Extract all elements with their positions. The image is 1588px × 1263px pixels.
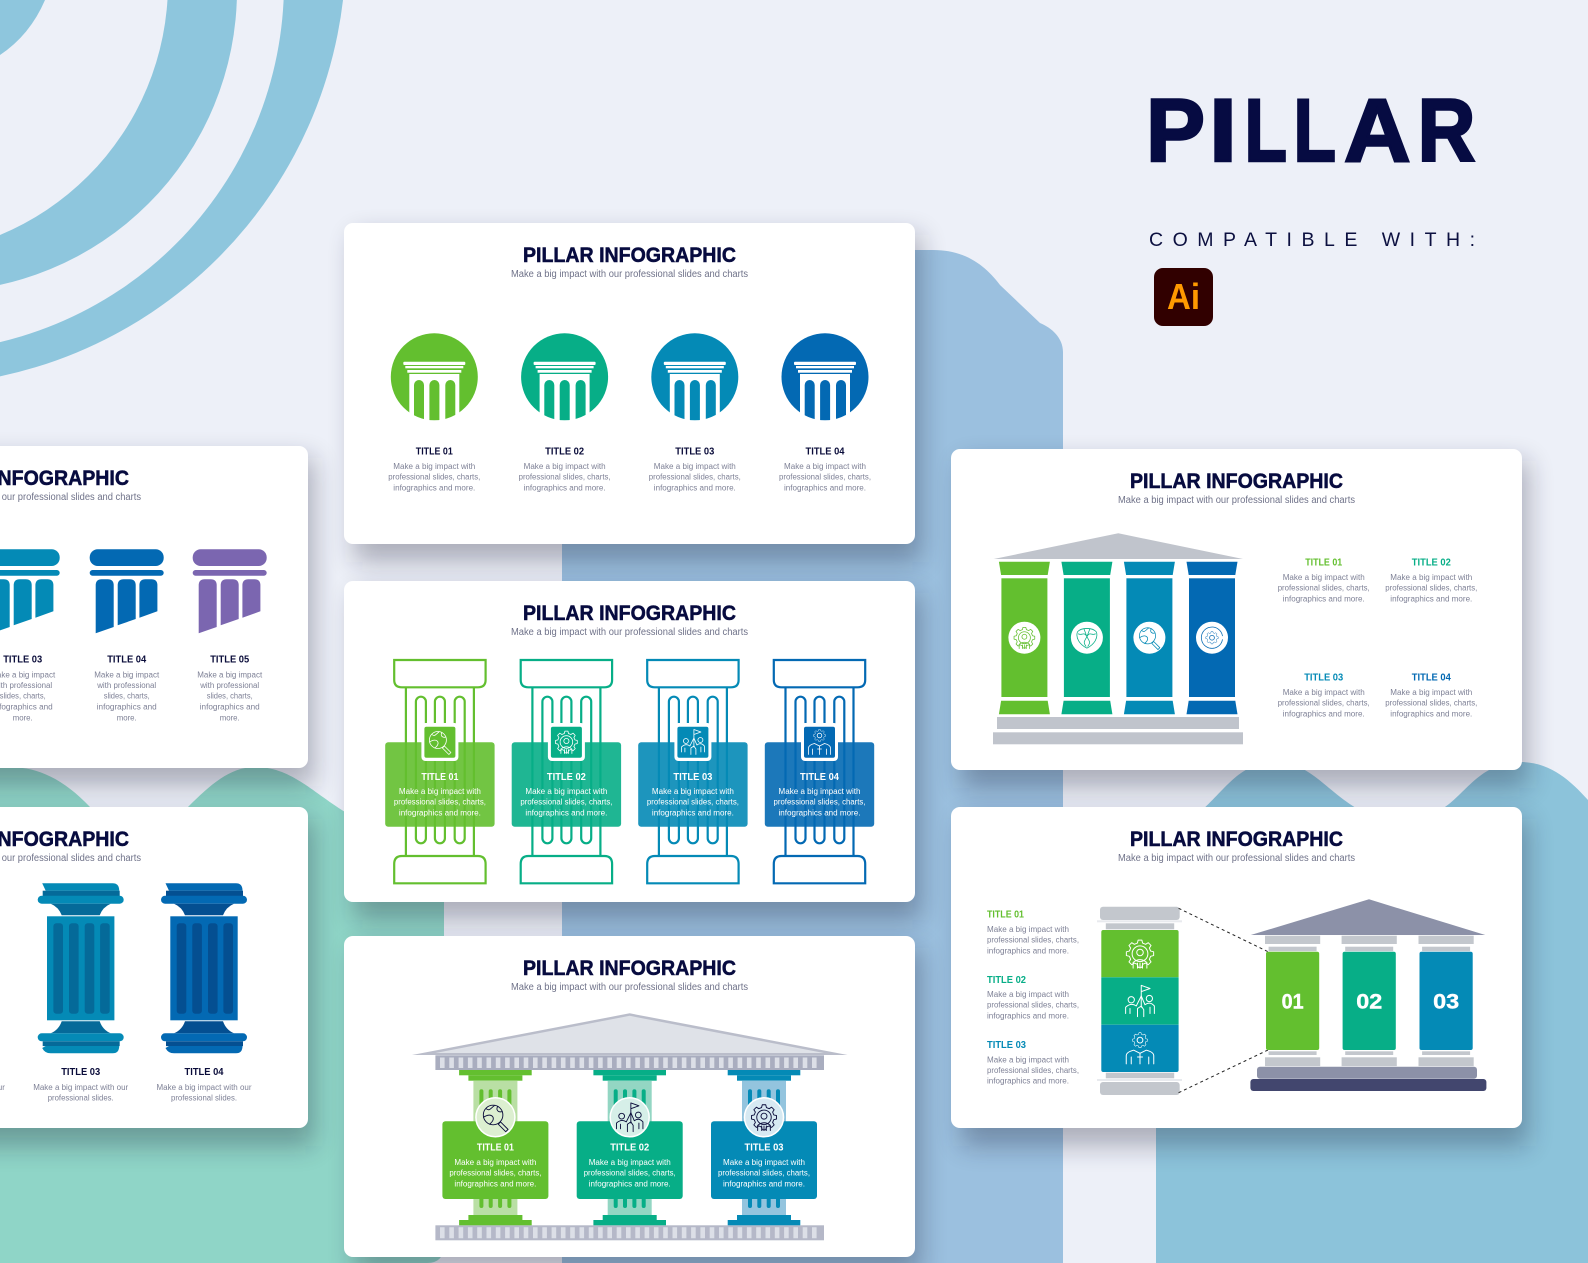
heading: PILLAR INFOGRAPHIC [523,601,736,625]
circle pillar 03: TITLE 03 [675,446,715,457]
text block 03 [1278,672,1370,718]
circle pillar 03 [649,333,741,492]
pillar column 05: Make a big impact [197,670,263,679]
temple column 02 [1342,936,1397,1066]
text block 01: TITLE 01 [987,910,1024,921]
heading: Make a big impact with our professional slides and charts [511,627,748,638]
heading: Make a big impact with our professional slides and charts [1118,495,1355,506]
panel: temple with three columns [344,936,915,1257]
icon: Adobe Illustrator: Ai [1167,276,1200,317]
outline pillar 04: infographics and more. [778,808,860,817]
text block 03: infographics and more. [1283,709,1365,718]
column 04: TITLE 04 [184,1067,224,1078]
column 01: Make a big impact with [454,1158,536,1167]
outline pillar 03: Make a big impact with [652,787,734,796]
column 01: TITLE 01 [477,1143,514,1154]
panel: zoomed pillar and temple [951,807,1522,1128]
heading: Make a big impact with our professional slides and charts [1118,853,1355,864]
text block 01 [987,910,1079,955]
circle pillar 01: TITLE 01 [416,446,453,457]
pillar column 05: with professional [199,681,259,690]
outline pillar 01 [385,660,495,883]
title: I [1209,80,1237,180]
text block 04: professional slides, charts, [1385,699,1477,708]
column 03 [711,1070,817,1225]
column 04 [1186,562,1238,714]
column 02: infographics and more. [589,1179,671,1188]
heading: PILLAR INFOGRAPHIC [1130,827,1343,851]
pillar column 04: slides, charts, [104,692,150,701]
text block 02 [987,975,1079,1020]
pillar column 04: infographics and [97,702,157,711]
column 03: Make a big impact with [723,1158,805,1167]
pillar column 05: more. [220,713,240,722]
temple column 01: 01 [1282,990,1304,1013]
heading [0,827,141,864]
text block 02: professional slides, charts, [987,1001,1079,1010]
column 02: professional slides, charts, [584,1169,676,1178]
icon: Adobe Illustrator [1154,268,1213,326]
pillar column 05: TITLE 05 [210,655,250,666]
column 01 [999,562,1050,714]
text block 04 [1385,672,1477,718]
text block 02 [1385,557,1477,603]
pillar column 04: with professional [96,681,156,690]
outline pillar 02: infographics and more. [525,808,607,817]
circle pillar 02: TITLE 02 [545,446,584,457]
column 04: Make a big impact with our [156,1083,252,1092]
outline pillar 02 [512,660,621,883]
circle pillar 02 [519,333,611,492]
circle pillar 04: TITLE 04 [806,446,845,457]
pillar column 05: slides, charts, [207,692,253,701]
heading: PILLAR INFOGRAPHIC [523,243,736,267]
text block 02: infographics and more. [1390,594,1472,603]
outline pillar 03 [638,660,748,883]
circle pillar 01: infographics and more. [393,483,475,492]
outline pillar 03: TITLE 03 [673,772,713,783]
title: L [1294,80,1336,180]
heading [511,243,748,280]
heading [511,601,748,638]
column 02: Make a big impact with [589,1158,671,1167]
outline pillar 03: professional slides, charts, [647,798,739,807]
heading: PILLAR INFOGRAPHIC [1130,469,1343,493]
text block 01: infographics and more. [987,946,1069,955]
column 03: infographics and more. [723,1179,805,1188]
outline pillar 02: professional slides, charts, [520,798,612,807]
temple [1250,899,1486,1091]
panel: temple with four columns [951,449,1522,770]
circle pillar 02: infographics and more. [524,483,606,492]
text block 01: professional slides, charts, [987,936,1079,945]
roof [412,1013,848,1070]
outline pillar 04: Make a big impact with [778,787,860,796]
circle pillar 02: professional slides, charts, [519,473,611,482]
circle pillar 04: professional slides, charts, [779,473,871,482]
text block 03: TITLE 03 [1304,672,1344,683]
pillar column 04 [90,549,164,722]
circle pillar 03: Make a big impact with [654,462,736,471]
text block 02: Make a big impact with [1390,573,1472,582]
heading [0,466,141,503]
text block 03: TITLE 03 [987,1040,1026,1051]
heading [1118,827,1355,864]
floor [435,1225,824,1240]
text block 03: Make a big impact with [1283,688,1365,697]
text block 01: TITLE 01 [1305,557,1343,568]
pillar column 04: more. [117,713,137,722]
circle pillar 01: Make a big impact with [393,462,475,471]
compatible with label: COMPATIBLE WITH: [1149,229,1475,251]
column 03: professional slides, charts, [718,1169,810,1178]
text block 02: Make a big impact with [987,990,1069,999]
temple column 03: 03 [1433,990,1459,1013]
column 03 [33,883,129,1103]
dashed connector lines [1179,908,1268,1093]
text block 02: infographics and more. [987,1011,1069,1020]
column 02: TITLE 02 [610,1143,650,1154]
text block 03: infographics and more. [987,1077,1069,1086]
text block 01 [1278,557,1370,603]
column 01 [442,1070,548,1225]
circle pillar 01: professional slides, charts, [388,473,480,482]
circle pillar 04 [779,333,871,492]
circle pillar 03: professional slides, charts, [649,473,741,482]
heading [511,956,748,993]
outline pillar 01: Make a big impact with [399,787,481,796]
panel: left classic columns [0,807,308,1128]
text block 01: Make a big impact with [987,925,1069,934]
text block 02: TITLE 02 [987,975,1026,986]
column 03 [1124,562,1175,714]
column 04 [156,883,252,1103]
column 03: professional slides. [48,1094,114,1103]
column 03: Make a big impact with our [33,1083,129,1092]
panel: left slanted pillars [0,446,308,768]
pillar column 05: infographics and [200,702,260,711]
pillar column 04: Make a big impact [94,670,160,679]
circle pillar 01 [388,333,480,492]
text block 01: infographics and more. [1283,594,1365,603]
text block 02: TITLE 02 [1412,557,1451,568]
panel: outline pillars [344,581,915,902]
temple column 03 [1418,936,1474,1066]
heading: Make a big impact with our professional slides and charts [511,982,748,993]
pillar column 03: slides, charts, [0,692,46,701]
circle pillar 04: infographics and more. [784,483,866,492]
text block 01: professional slides, charts, [1278,584,1370,593]
title [1146,80,1475,180]
pillar column 03 [0,549,60,722]
column 03: TITLE 03 [61,1067,101,1078]
text block 04: Make a big impact with [1390,688,1472,697]
pillar column 03: more. [13,713,33,722]
pillar column 03: TITLE 03 [3,655,43,666]
outline pillar 01: infographics and more. [399,808,481,817]
text block 01: Make a big impact with [1283,573,1365,582]
zoomed pillar [1097,907,1182,1095]
title: L [1244,80,1287,180]
column 02 [1061,562,1112,714]
temple roof and plinths [993,533,1243,744]
column 04: professional slides. [171,1094,237,1103]
circle pillar 02: Make a big impact with [524,462,606,471]
outline pillar 02: Make a big impact with [525,787,607,796]
outline pillar 04: professional slides, charts, [774,798,866,807]
heading: Make a big impact with our professional slides and charts [511,269,748,280]
text block 03: professional slides, charts, [1278,699,1370,708]
text block 02: professional slides, charts, [1385,584,1477,593]
circle pillar 04: Make a big impact with [784,462,866,471]
column 01: infographics and more. [454,1179,536,1188]
text block 03 [987,1040,1079,1086]
pillar column 05 [193,549,267,722]
heading: PILLAR INFOGRAPHIC [523,956,736,980]
temple column 01 [1265,936,1320,1066]
text block 03: professional slides, charts, [987,1066,1079,1075]
pillar column 04: TITLE 04 [107,655,147,666]
title: P [1146,80,1205,180]
column 03: TITLE 03 [744,1143,784,1154]
panel: circle pillars [344,223,915,544]
title: A [1344,80,1411,180]
text block 03: Make a big impact with [987,1055,1069,1064]
outline pillar 01: TITLE 01 [421,772,459,783]
column 02 [577,1070,683,1225]
outline pillar 02: TITLE 02 [547,772,586,783]
text block 04: TITLE 04 [1412,672,1451,683]
text block 04: infographics and more. [1390,709,1472,718]
column 01: professional slides, charts, [449,1169,541,1178]
outline pillar 04: TITLE 04 [800,772,839,783]
title: R [1418,80,1475,180]
temple column 02: 02 [1356,990,1382,1013]
outline pillar 01: professional slides, charts, [394,798,486,807]
heading [1118,469,1355,506]
circle pillar 03: infographics and more. [654,483,736,492]
outline pillar 04 [765,660,874,883]
outline pillar 03: infographics and more. [652,808,734,817]
